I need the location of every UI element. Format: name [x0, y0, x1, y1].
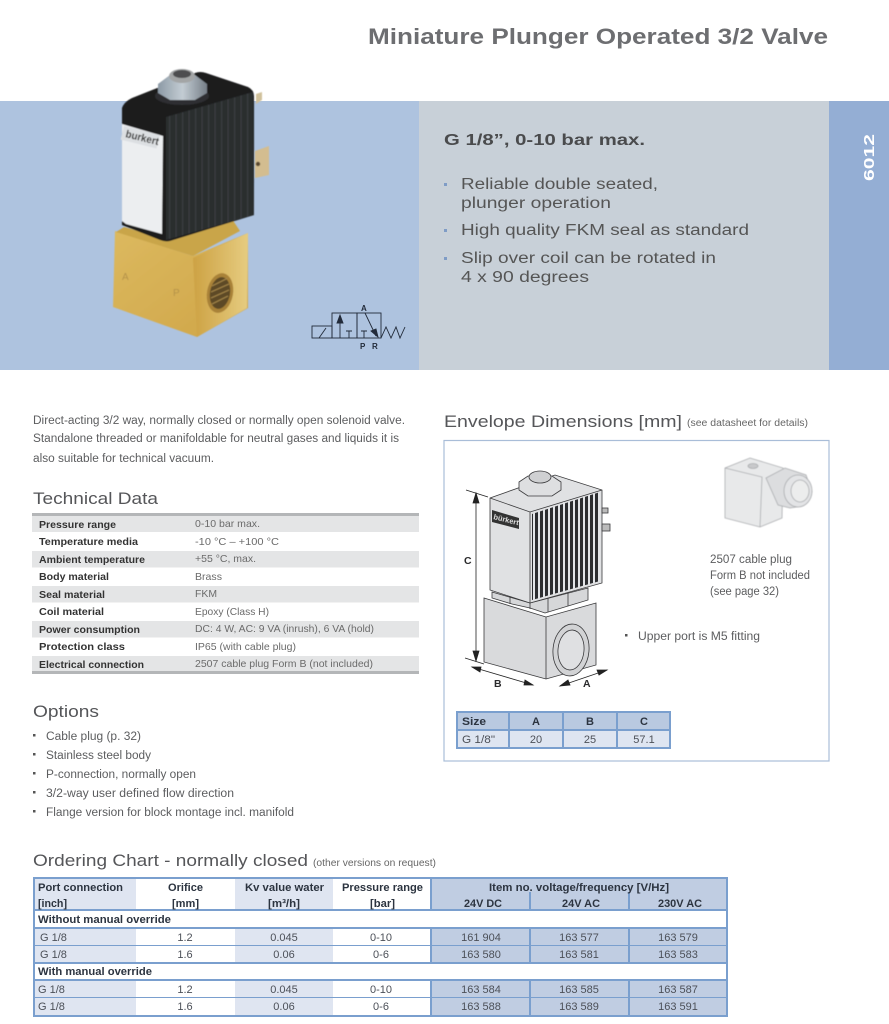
- options list: Flange version for block montage incl. manifold: [46, 807, 294, 819]
- feature list: plunger operation: [461, 195, 611, 212]
- row group: without manual override: G 1/8: [40, 932, 67, 944]
- row group: without manual override: 161 904: [461, 932, 501, 944]
- icon: valve product photo: [113, 69, 269, 337]
- page title: Miniature Plunger Operated 3/2 Valve: [368, 24, 828, 49]
- table: technical data: FKM: [195, 588, 217, 600]
- icon: cable plug: [725, 458, 812, 527]
- table header: Item no. voltage/frequency [V/Hz]: [489, 882, 669, 894]
- table header: [mm]: [172, 898, 199, 910]
- icon: valve circuit symbol: R: [372, 342, 378, 351]
- table: size dimensions: 20: [530, 734, 542, 746]
- table header: Orifice: [168, 882, 203, 894]
- feature list: [444, 176, 749, 286]
- icon: valve circuit symbol: [312, 304, 405, 351]
- table: size dimensions: 25: [584, 734, 596, 746]
- options list: [33, 731, 294, 819]
- row group: without manual override: G 1/8: [40, 949, 67, 961]
- table: size dimensions: 57.1: [633, 734, 655, 746]
- plug note: (see page 32): [710, 586, 779, 598]
- row group: with manual override: 1.6: [177, 1001, 193, 1013]
- table: technical data: Power consumption: [39, 624, 140, 636]
- table: technical data: -10 °C – +100 °C: [195, 536, 279, 548]
- row group: with manual override: With manual override: [38, 966, 152, 978]
- panel: header band: [0, 101, 889, 370]
- row group: without manual override: 163 577: [559, 932, 599, 944]
- row group: without manual override: 163 580: [461, 949, 501, 961]
- plug note: 2507 cable plug: [710, 554, 792, 566]
- table header: [bar]: [370, 898, 395, 910]
- table: technical data: Coil material: [39, 606, 104, 618]
- intro paragraph: Direct-acting 3/2 way, normally closed or normally open solenoid valve.: [33, 415, 405, 427]
- panel: envelope dimensions: [444, 440, 829, 761]
- row group: with manual override: 163 585: [559, 984, 599, 996]
- row group: without manual override: 163 581: [559, 949, 599, 961]
- row group: with manual override: [35, 964, 726, 1015]
- dimension labels: B: [494, 678, 502, 690]
- row group: with manual override: 1.2: [177, 984, 193, 996]
- table: technical data: Body material: [39, 571, 109, 583]
- icon: valve circuit symbol: A: [361, 304, 367, 313]
- icon: valve circuit symbol: P: [360, 342, 366, 351]
- table header: 230V AC: [658, 898, 702, 910]
- table: technical data: Ambient temperature: [39, 554, 145, 566]
- table: technical data: Electrical connection: [39, 659, 144, 671]
- table: technical data: 2507 cable plug Form B (not included): [195, 658, 373, 670]
- intro paragraph: Standalone threaded or manifoldable for neutral gases and liquids it is: [33, 433, 399, 445]
- intro paragraph: also suitable for technical vacuum.: [33, 453, 214, 465]
- table: size dimensions: B: [586, 716, 594, 728]
- heading: ordering chart: [33, 851, 436, 870]
- row group: with manual override: 163 584: [461, 984, 501, 996]
- dimension labels: [464, 555, 591, 690]
- row group: with manual override: G 1/8: [38, 1001, 65, 1013]
- table header: [m³/h]: [268, 898, 300, 910]
- options list: P-connection, normally open: [46, 769, 196, 781]
- icon: valve product photo: A: [122, 272, 129, 283]
- plug note: [710, 554, 810, 598]
- row group: without manual override: 163 579: [658, 932, 698, 944]
- row group: with manual override: 0.045: [270, 984, 298, 996]
- row group: with manual override: G 1/8: [38, 984, 65, 996]
- table header: 24V AC: [562, 898, 600, 910]
- heading: ordering chart: Ordering Chart - normally closed: [33, 851, 308, 870]
- table: technical data: Epoxy (Class H): [195, 606, 269, 618]
- row group: with manual override: 163 587: [658, 984, 698, 996]
- icon: valve product photo: P: [173, 288, 180, 299]
- table: technical data: Protection class: [39, 641, 125, 653]
- heading: envelope dimensions: Envelope Dimensions [mm]: [444, 412, 682, 431]
- table header: Port connection: [38, 882, 123, 894]
- dimension labels: A: [583, 678, 591, 690]
- table header: [inch]: [38, 898, 67, 910]
- table: technical data: 0-10 bar max.: [195, 518, 260, 530]
- table: technical data: Brass: [195, 571, 222, 583]
- options list: Cable plug (p. 32): [46, 731, 141, 743]
- table: technical data: DC: 4 W, AC: 9 VA (inrush), 6 VA (hold): [195, 623, 374, 635]
- table: technical data: IP65 (with cable plug): [195, 641, 296, 653]
- row group: without manual override: 0-10: [370, 932, 392, 944]
- heading: options: Options: [33, 702, 99, 721]
- table: technical data: Temperature media: [39, 536, 138, 548]
- heading: envelope dimensions: [444, 412, 808, 431]
- series number tab label: 6012: [861, 134, 878, 181]
- dimension lines: [465, 490, 607, 686]
- row group: without manual override: 0-6: [373, 949, 389, 961]
- row group: without manual override: Without manual override: [38, 914, 171, 926]
- row group: without manual override: [35, 911, 726, 962]
- row group: without manual override: 1.6: [177, 949, 193, 961]
- feature list: Reliable double seated,: [461, 176, 658, 193]
- heading: ordering chart: (other versions on request): [313, 858, 436, 869]
- row group: without manual override: 0.045: [270, 932, 298, 944]
- diagram: valve dimensions drawing: bürkert: [493, 512, 520, 527]
- feature list: 4 x 90 degrees: [461, 269, 589, 286]
- table: ordering chart: [33, 877, 728, 1017]
- diagram: valve dimensions drawing: [484, 471, 610, 679]
- table: size dimensions: G 1/8": [462, 734, 495, 746]
- table header: Pressure range: [342, 882, 423, 894]
- options list: Stainless steel body: [46, 750, 151, 762]
- row group: with manual override: 163 591: [658, 1001, 698, 1013]
- subtitle: port and pressure: G 1/8”, 0-10 bar max.: [444, 132, 645, 149]
- table header: Kv value water: [245, 882, 325, 894]
- table: technical data: Seal material: [39, 589, 105, 601]
- table header: 24V DC: [464, 898, 502, 910]
- port note: Upper port is M5 fitting: [638, 631, 760, 643]
- heading: envelope dimensions: (see datasheet for details): [687, 418, 808, 429]
- table: size dimensions: Size: [462, 716, 486, 728]
- table: size dimensions: A: [532, 716, 540, 728]
- plug note: Form B not included: [710, 570, 810, 582]
- row group: with manual override: 163 589: [559, 1001, 599, 1013]
- row group: without manual override: 163 583: [658, 949, 698, 961]
- table: technical data: [32, 513, 419, 674]
- feature list: Slip over coil can be rotated in: [461, 250, 716, 267]
- feature list: High quality FKM seal as standard: [461, 222, 749, 239]
- table: size dimensions: [456, 711, 671, 749]
- dimension labels: C: [464, 555, 472, 567]
- options list: 3/2-way user defined flow direction: [46, 788, 234, 800]
- intro paragraph: [33, 415, 405, 465]
- heading: technical data: Technical Data: [33, 489, 159, 508]
- table header: [35, 879, 726, 910]
- table: technical data: Pressure range: [39, 519, 116, 531]
- row group: with manual override: 0.06: [273, 1001, 295, 1013]
- row group: with manual override: 0-6: [373, 1001, 389, 1013]
- row group: with manual override: 163 588: [461, 1001, 501, 1013]
- row group: with manual override: 0-10: [370, 984, 392, 996]
- table: technical data: +55 °C, max.: [195, 553, 256, 565]
- icon: valve product photo: burkert: [124, 128, 161, 148]
- row group: without manual override: 0.06: [273, 949, 295, 961]
- row group: without manual override: 1.2: [177, 932, 193, 944]
- table: size dimensions: C: [640, 716, 648, 728]
